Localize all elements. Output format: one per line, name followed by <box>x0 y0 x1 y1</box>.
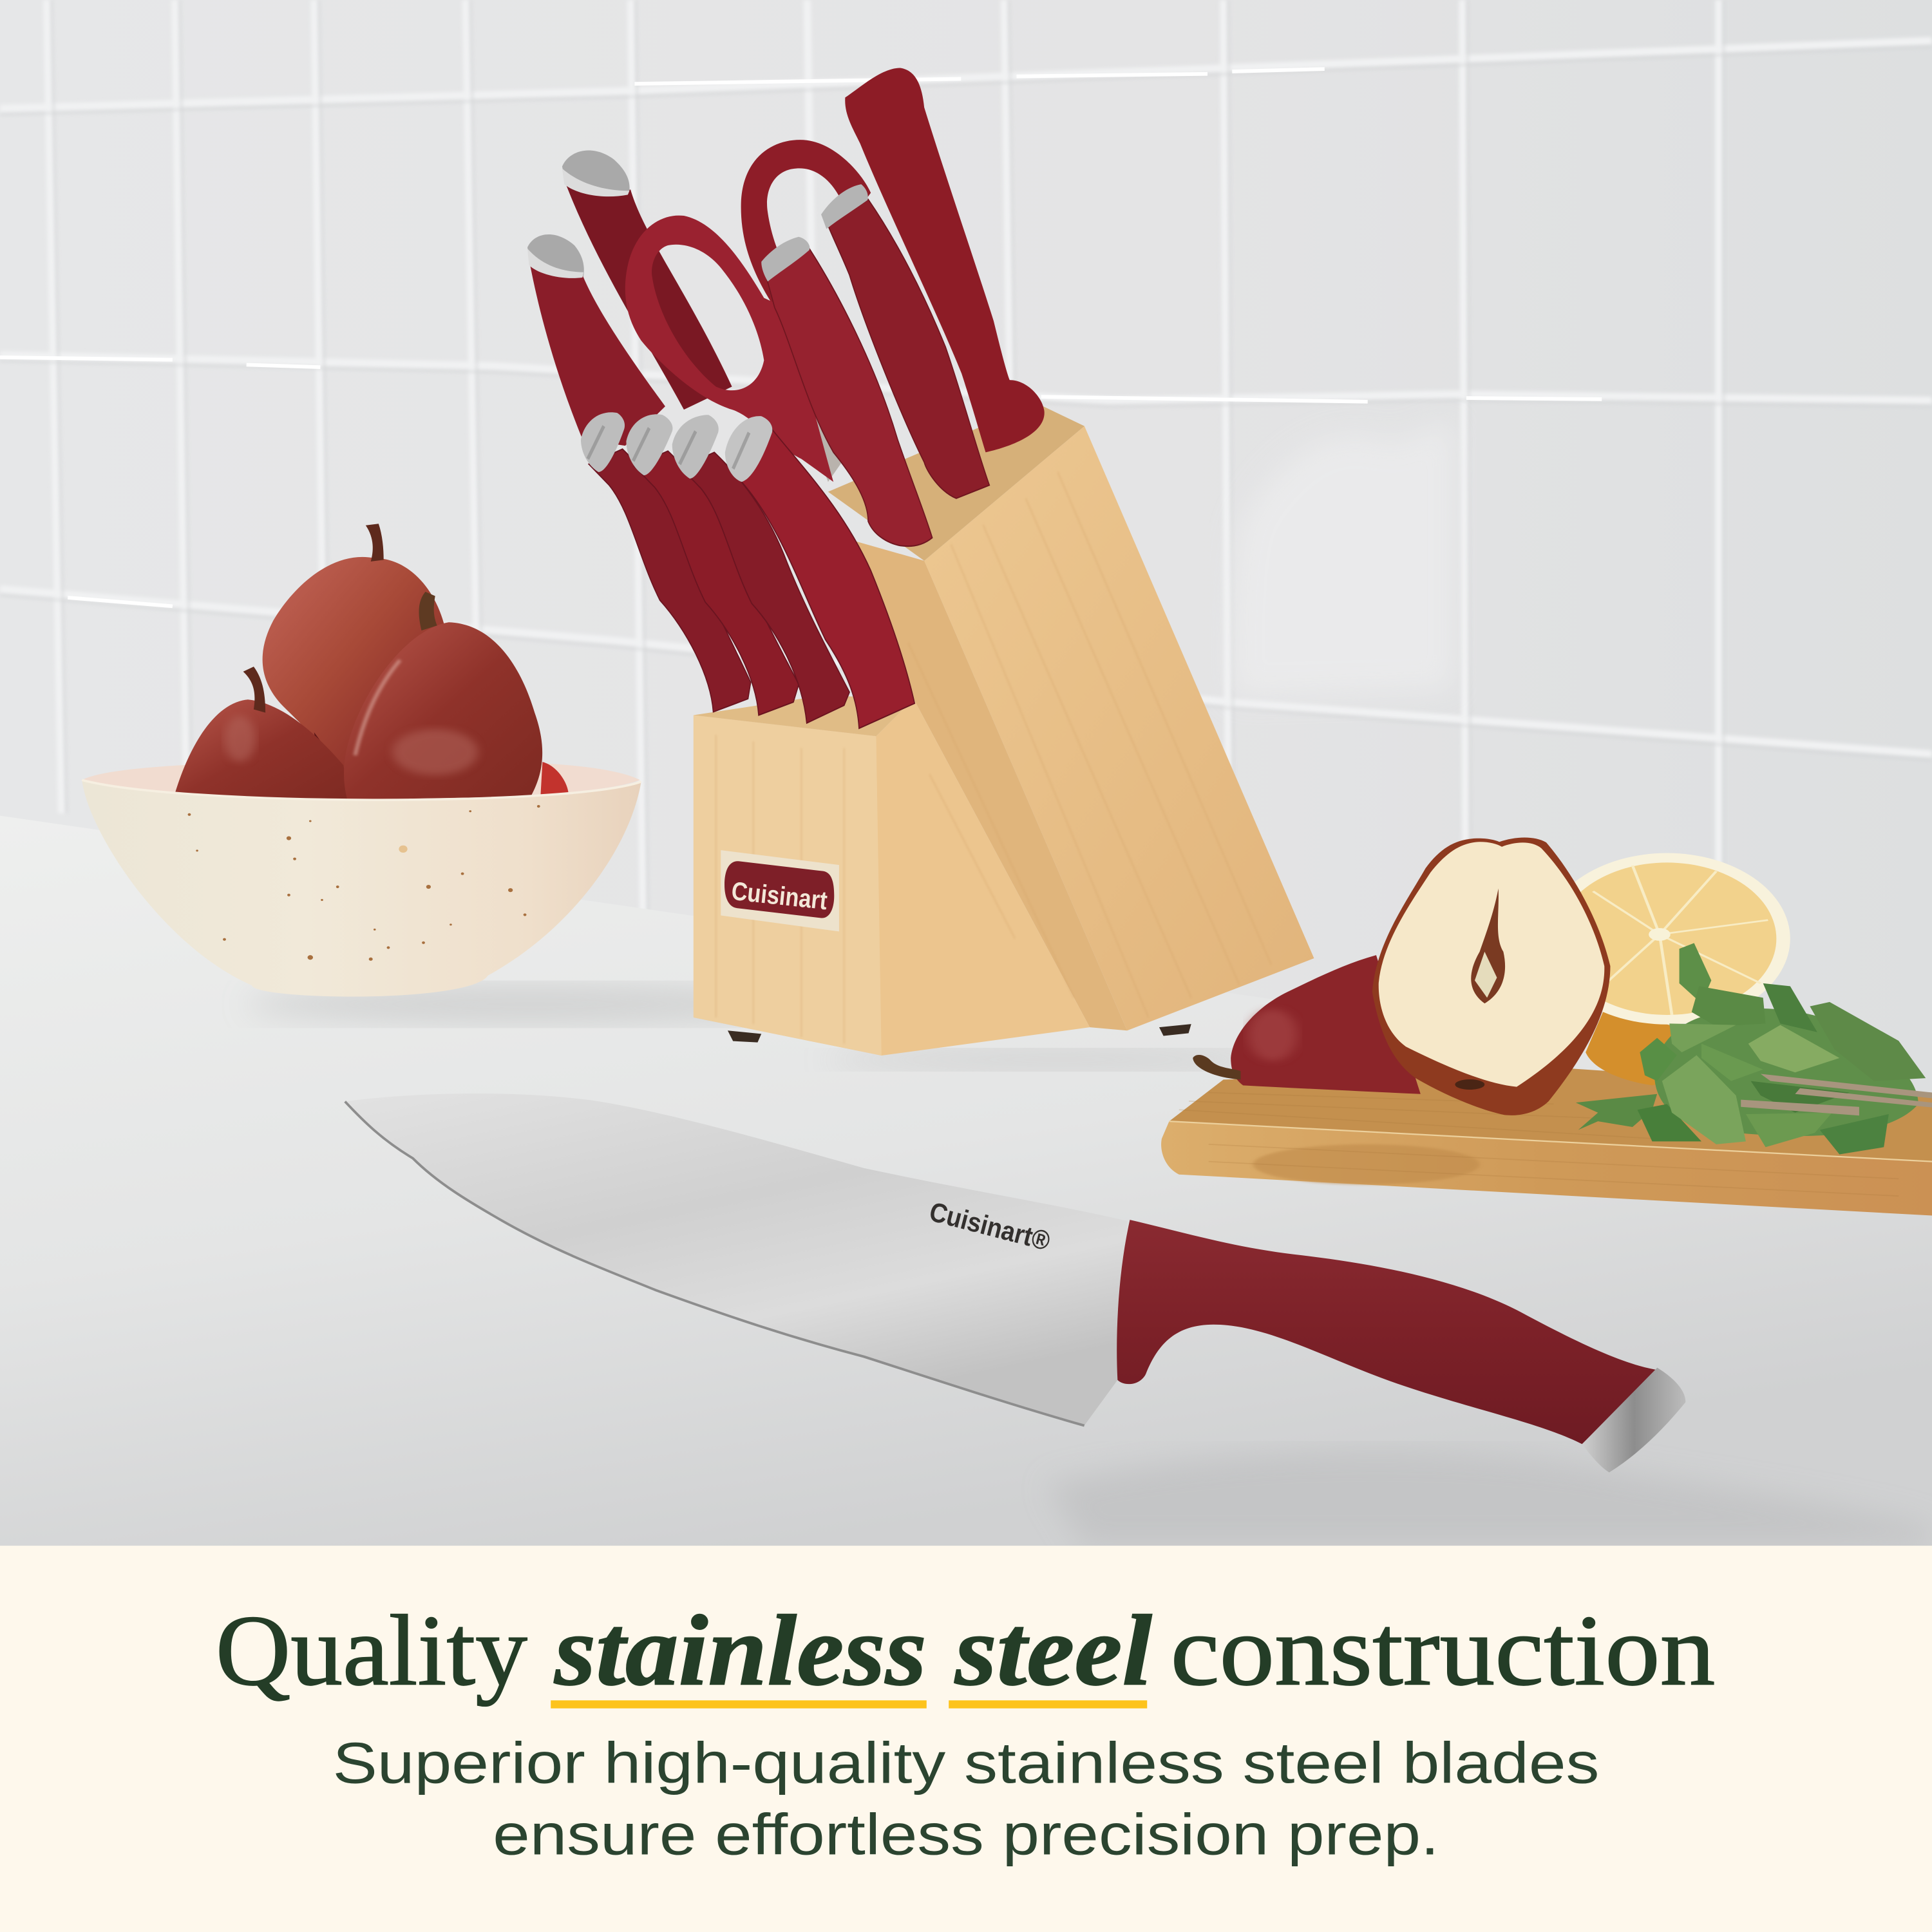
cutting board with pear, lemon and mint <box>1161 838 1932 1216</box>
heading: construction <box>1171 1594 1715 1706</box>
scissor serrated blade <box>807 380 844 482</box>
countertop <box>0 816 1932 1546</box>
tall back knife handle <box>845 68 1045 452</box>
heading: Quality <box>216 1594 527 1706</box>
bowl of pears <box>82 524 641 997</box>
chef's knife <box>345 1094 1685 1472</box>
yellow underlines <box>551 1700 1147 1709</box>
block feet <box>728 1024 1191 1043</box>
lemon peel <box>1586 1007 1674 1085</box>
background: tiled wall <box>0 0 1932 1109</box>
pear half <box>1372 838 1610 1115</box>
rear center knife handle <box>821 184 989 498</box>
front scissor handle <box>625 216 833 482</box>
front knife handle 3 <box>672 415 849 723</box>
upper left knife handle <box>562 151 732 410</box>
mint bunch <box>1576 943 1932 1154</box>
block back slot face <box>924 426 1314 1030</box>
knife block with knives <box>527 68 1314 1056</box>
front knife handle 4 <box>725 416 914 728</box>
blade logo: Cuisinart® <box>926 1196 1053 1256</box>
large front pear <box>344 592 542 800</box>
block top face <box>828 403 1084 561</box>
whole pear <box>1193 955 1421 1094</box>
back pear <box>263 524 445 785</box>
bowl interior <box>82 760 640 800</box>
subheading: ensure effortless precision prep. <box>493 1803 1439 1867</box>
handle <box>1117 1220 1658 1444</box>
block front face <box>694 699 1090 1056</box>
block badge: Cuisinart <box>730 876 829 915</box>
block badge <box>721 850 839 931</box>
heading: steel <box>954 1594 1152 1706</box>
caption panel <box>0 1546 1932 1932</box>
front center knife handle <box>761 237 933 546</box>
small red pear behind <box>540 762 569 797</box>
front knife handle 1 <box>581 412 751 712</box>
left small pear <box>175 667 349 800</box>
front knife handle 2 <box>626 414 799 715</box>
subheading: Superior high-quality stainless steel blades <box>333 1731 1599 1795</box>
handle end cap <box>1582 1368 1685 1472</box>
blade <box>345 1094 1128 1426</box>
bowl speckles <box>188 805 540 961</box>
heading <box>216 1594 1715 1706</box>
block slope face <box>855 541 1127 1030</box>
cut lemon <box>1544 853 1790 1025</box>
lower left knife handle <box>527 234 665 446</box>
board <box>1161 1068 1932 1216</box>
block wood grain <box>716 472 1271 1044</box>
bowl body <box>82 780 641 997</box>
back scissor loop <box>741 140 871 308</box>
subheading <box>333 1731 1599 1867</box>
heading: stainless <box>554 1594 927 1706</box>
